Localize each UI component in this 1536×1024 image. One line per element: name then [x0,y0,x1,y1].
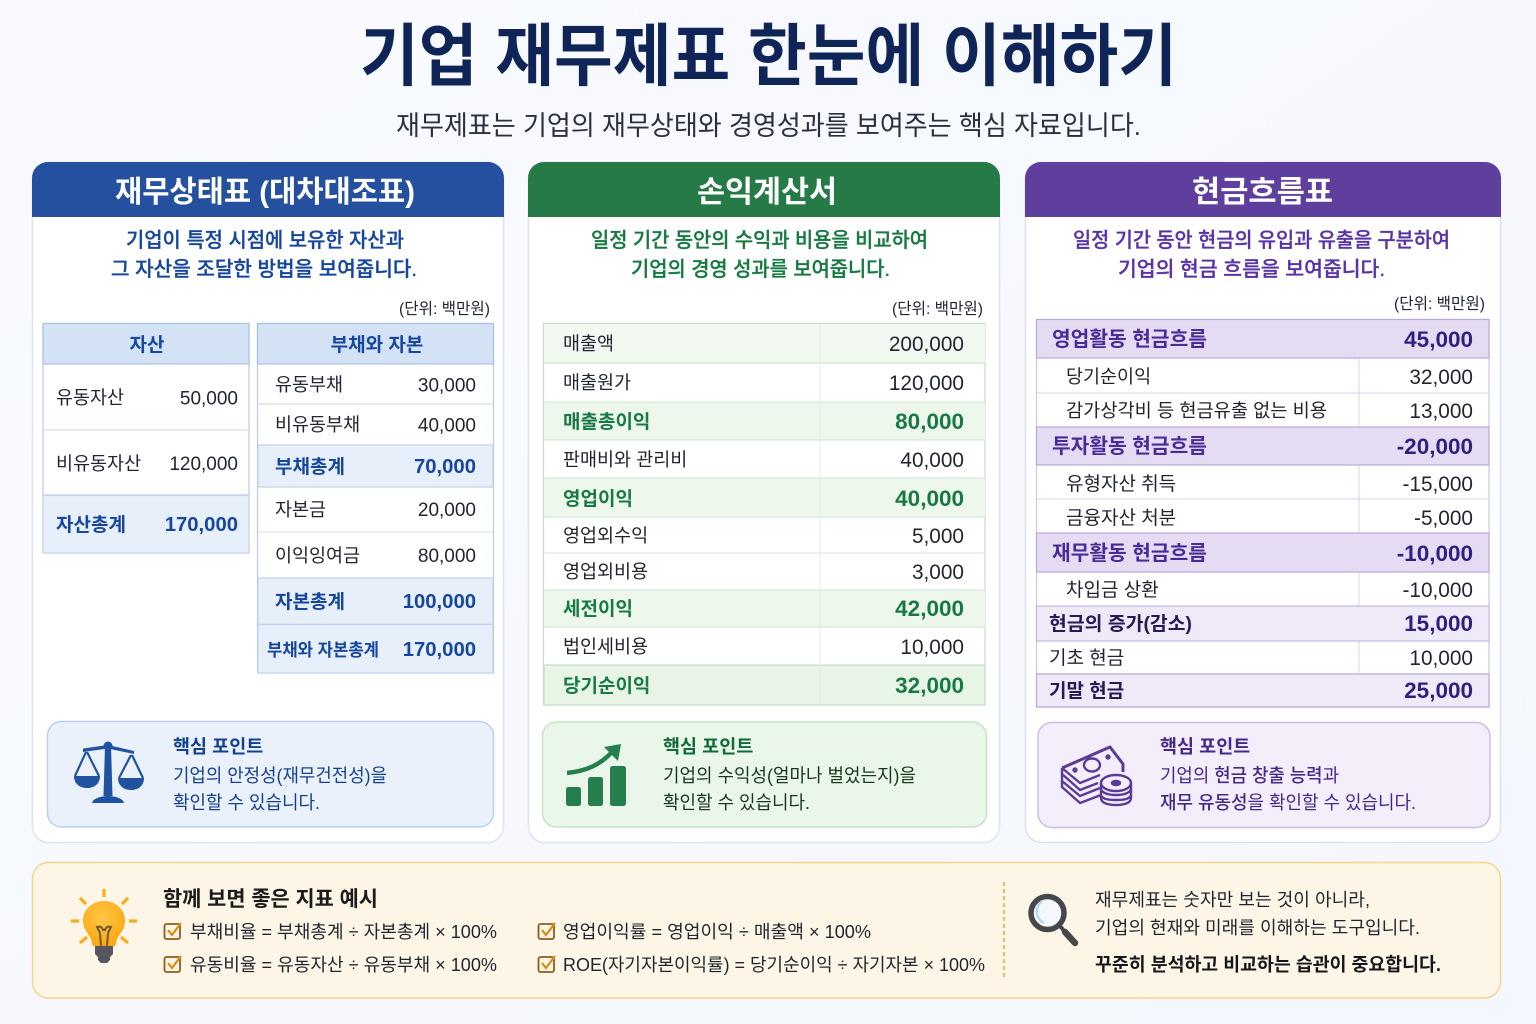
row: total liabilities and equity: 부채와 자본총계 [267,640,379,660]
description: balance sheet: 기업이 특정 시점에 보유한 자산과 [126,229,404,252]
row: investing cash flow: -20,000 [1397,434,1473,459]
row: total equity: 100,000 [403,591,476,613]
row: tangible asset acquisition: 유형자산 취득 [1066,473,1176,495]
row: ending cash: 25,000 [1404,678,1473,703]
row: operating income: 영업이익 [563,488,633,510]
description: cash flow statement: 일정 기간 동안 현금의 유입과 유출을 구분하여 [1073,229,1450,252]
description: income statement [591,229,928,281]
row: financing cash flow [1036,533,1489,572]
row: non-current liabilities [275,414,476,436]
row: total liabilities: 70,000 [414,456,476,478]
row: operating cash flow: 영업활동 현금흐름 [1052,328,1207,351]
row: operating cash flow: 45,000 [1404,327,1473,352]
callout text [1160,736,1416,813]
row: depreciation: 감가상각비 등 현금유출 없는 비용 [1066,400,1327,421]
row: loan repayment: 차입금 상환 [1066,579,1159,601]
row: net increase in cash: 현금의 증가(감소) [1049,613,1192,635]
indicator: operating margin: 영업이익률 = 영업이익 ÷ 매출액 × 100% [563,922,871,942]
row: financial asset disposal [1066,507,1473,530]
row: gross profit: 매출총이익 [563,411,650,433]
row: ending cash: 기말 현금 [1049,680,1124,702]
row: retained earnings: 80,000 [418,546,476,567]
callout text [173,736,387,813]
closing message: 재무제표는 숫자만 보는 것이 아니라, [1095,890,1370,910]
unit note: (단위: 백만원) [1394,295,1485,313]
icon: light bulb [71,889,137,963]
indicator: current ratio: 유동비율 = 유동자산 ÷ 유동부채 × 100% [190,955,497,975]
panel: balance sheet [32,162,504,842]
row: non-operating income: 5,000 [912,525,964,548]
row: non-operating income [544,525,985,553]
callout text [663,736,916,813]
row: income tax: 10,000 [900,636,964,659]
row: financing cash flow: -10,000 [1397,541,1473,566]
row: net income: 당기순이익 [563,675,650,697]
row: non-operating income: 영업외수익 [563,525,648,546]
assets header [43,324,249,364]
table: assets [43,324,249,553]
description: cash flow statement: 기업의 현금 흐름을 보여줍니다. [1118,258,1385,281]
closing message [1095,890,1441,975]
row: operating income [544,478,985,517]
row: income tax: 법인세비용 [563,636,648,657]
row: SG&A: 40,000 [900,449,964,472]
row: depreciation [1066,400,1473,423]
panel: income statement [528,162,1000,842]
description: balance sheet [111,229,417,281]
row: gross profit: 80,000 [895,409,964,434]
table: liabilities and equity [258,324,494,673]
row: capital stock [258,499,493,532]
row: non-current liabilities: 비유동부채 [275,414,360,435]
row: cost of sales: 120,000 [889,372,964,395]
description: income statement: 기업의 경영 성과를 보여줍니다. [631,258,890,281]
row: current liabilities [258,374,493,404]
heading: cash flow statement: 현금흐름표 [1192,176,1333,209]
row: loan repayment [1066,579,1473,602]
row: total equity: 자본총계 [275,591,345,613]
row: current assets: 유동자산 [56,387,124,408]
row: total liabilities and equity: 170,000 [403,639,476,661]
row: retained earnings: 이익잉여금 [275,545,360,566]
icon: scales [74,742,144,803]
row: income tax [563,636,964,659]
liabilities header [258,324,494,364]
row: cost of sales: 매출원가 [563,372,631,393]
row: non-operating expense: 영업외비용 [563,561,648,582]
row: depreciation: 13,000 [1409,400,1473,423]
row: revenue [544,324,985,363]
row: revenue: 매출액 [563,333,614,354]
row: total equity [258,578,493,624]
row: operating cash flow [1036,320,1489,358]
row: retained earnings [275,545,476,567]
title: 기업 재무제표 한눈에 이해하기 [360,19,1177,95]
row: SG&A [563,449,964,472]
row: operating income: 40,000 [895,486,964,511]
row: ending cash [1036,674,1489,707]
heading: income statement: 손익계산서 [697,176,837,209]
callout text: 기업의 현금 창출 능력과 [1160,765,1339,786]
icon: growth chart [566,744,626,806]
unit note: (단위: 백만원) [399,300,490,318]
row: total assets: 170,000 [165,514,238,536]
row: net income [544,665,985,705]
row: pre-tax income [544,590,985,627]
icon: cash and coins [1062,747,1131,805]
row: non-current assets: 비유동자산 [56,453,141,474]
row: capital stock: 20,000 [418,500,476,521]
row: current assets [43,387,249,430]
row: non-operating expense: 3,000 [912,561,964,584]
row: capital stock: 자본금 [275,499,326,520]
row: non-current assets [43,453,249,495]
row: current assets: 50,000 [180,388,238,410]
callout text: 핵심 포인트 [1160,736,1250,757]
row: beginning cash: 10,000 [1409,647,1473,670]
liabilities header: 부채와 자본 [331,334,423,356]
heading: balance sheet [32,162,504,217]
callout: balance sheet key point [48,722,494,827]
row: total assets [43,496,249,553]
description: balance sheet: 그 자산을 조달한 방법을 보여줍니다. [111,258,417,281]
subtitle: 재무제표는 기업의 재무상태와 경영성과를 보여주는 핵심 자료입니다. [396,111,1141,141]
row: cost of sales [563,372,964,395]
row: total liabilities: 부채총계 [275,456,345,478]
indicator: debt ratio: 부채비율 = 부채총계 ÷ 자본총계 × 100% [190,922,497,942]
row: revenue: 200,000 [889,333,964,356]
callout text: 기업의 안정성(재무건전성)을 [173,765,387,786]
row: investing cash flow: 투자활동 현금흐름 [1052,435,1207,458]
callout text: 핵심 포인트 [663,736,753,757]
row: net increase in cash [1036,606,1489,641]
indicators heading: 함께 보면 좋은 지표 예시 [163,888,378,911]
row: current liabilities: 유동부채 [275,374,343,395]
closing message: 기업의 현재와 미래를 이해하는 도구입니다. [1095,918,1420,938]
callout text: 기업의 수익성(얼마나 벌었는지)을 [663,765,916,786]
callout: cash flow key point [1038,722,1490,828]
callout text: 확인할 수 있습니다. [663,792,810,813]
heading: income statement [528,162,1000,217]
row: tangible asset acquisition [1066,473,1473,496]
row: non-current assets: 120,000 [169,454,238,475]
row: net income: 32,000 [1409,366,1473,389]
icon: magnifying glass [1031,896,1075,943]
callout text: 재무 유동성을 확인할 수 있습니다. [1160,792,1416,813]
row: total liabilities [258,445,493,487]
row: financial asset disposal: 금융자산 처분 [1066,507,1176,529]
closing message: 꾸준히 분석하고 비교하는 습관이 중요합니다. [1095,954,1441,975]
row: net income: 당기순이익 [1066,366,1151,387]
callout: income statement key point [542,722,986,827]
panel: bottom indicators and tip [32,862,1500,998]
heading: cash flow statement [1025,162,1501,217]
indicator: ROE: ROE(자기자본이익률) = 당기순이익 ÷ 자기자본 × 100% [563,955,985,975]
row: financial asset disposal: -5,000 [1414,507,1473,530]
row: non-operating expense [563,561,964,584]
unit note: (단위: 백만원) [892,300,983,318]
row: net increase in cash: 15,000 [1404,611,1473,636]
row: beginning cash [1049,647,1473,670]
row: pre-tax income: 42,000 [895,596,964,621]
row: beginning cash: 기초 현금 [1049,647,1124,669]
description: cash flow statement [1073,229,1450,281]
row: total liabilities and equity [258,624,493,673]
row: non-current liabilities: 40,000 [418,416,476,436]
row: total assets: 자산총계 [56,514,126,536]
callout text: 핵심 포인트 [173,736,263,757]
panel: cash flow statement [1025,162,1501,842]
row: investing cash flow [1036,427,1489,465]
row: financing cash flow: 재무활동 현금흐름 [1052,542,1207,565]
row: pre-tax income: 세전이익 [563,598,633,620]
row: net income: 32,000 [895,673,964,698]
heading: balance sheet: 재무상태표 (대차대조표) [115,176,415,209]
row: loan repayment: -10,000 [1402,579,1473,602]
callout text: 확인할 수 있습니다. [173,792,320,813]
table: income statement [544,324,985,705]
assets header: 자산 [130,334,164,356]
description: income statement: 일정 기간 동안의 수익과 비용을 비교하여 [591,229,928,252]
row: SG&A: 판매비와 관리비 [563,449,687,470]
table: cash flow [1036,320,1489,707]
row: tangible asset acquisition: -15,000 [1402,473,1473,496]
row: gross profit [544,402,985,440]
row: net income [1066,366,1473,389]
row: current liabilities: 30,000 [418,376,476,396]
